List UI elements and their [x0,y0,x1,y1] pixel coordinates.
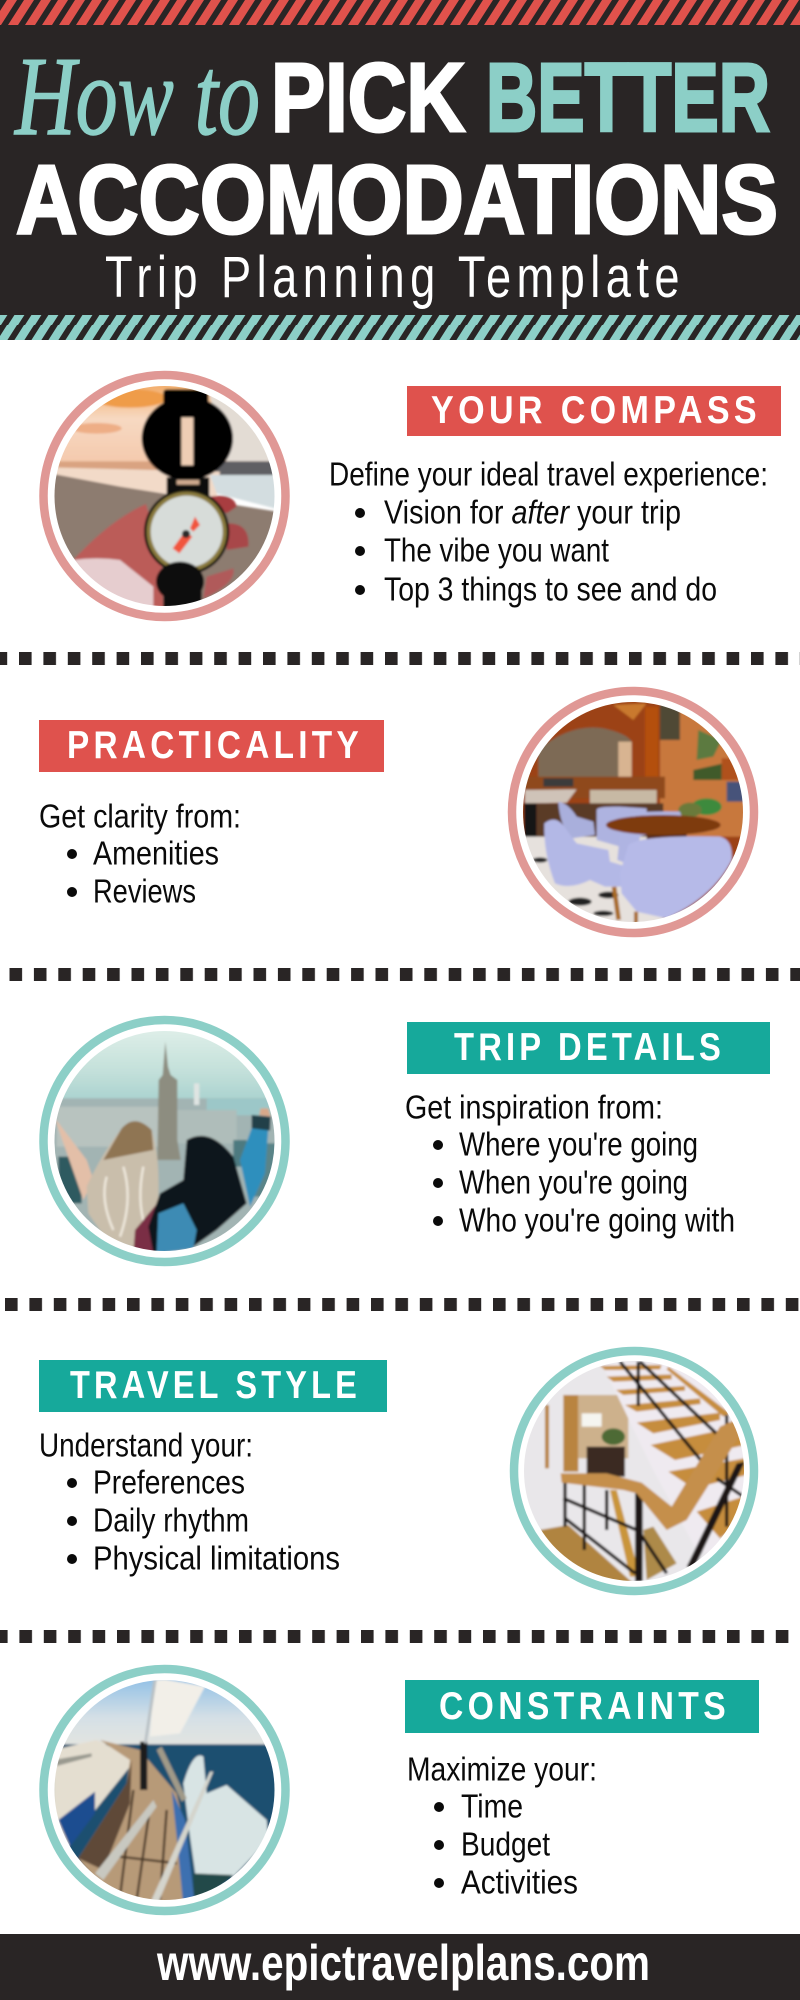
panel: your compass [44,375,781,617]
heading: practicality: PRACTICALITY [67,724,363,767]
heading: travel style: TRAVEL STYLE [70,1364,361,1407]
text block: your compass: Vision for after your trip [384,494,681,531]
text block: trip details: Where you're going [459,1126,698,1163]
heading: your compass: YOUR COMPASS [431,389,761,432]
text block: travel style: Daily rhythm [93,1502,249,1539]
text block: constraints: Maximize your: [407,1751,597,1788]
text block: trip details: Who you're going with [459,1202,735,1239]
heading: constraints: CONSTRAINTS [439,1685,730,1728]
text block: your compass: Top 3 things to see and do [384,571,717,608]
top red striped band [0,0,800,25]
photo: sailboat deck at sea [44,1669,286,1911]
text block: practicality: Reviews [93,873,196,910]
title script: How to: How to [14,35,260,159]
panel: constraints [44,1669,759,1911]
text block: travel style: Preferences [93,1464,245,1501]
text block: travel style: Understand your: [39,1427,253,1464]
text block: practicality: Get clarity from: [39,798,241,835]
text block: travel style [39,1427,340,1577]
text block: constraints [407,1751,597,1901]
text block: constraints: Activities [461,1864,578,1901]
text block: trip details [405,1089,735,1239]
text block: trip details: When you're going [459,1164,688,1201]
photo: restaurant interior [512,691,754,933]
photo: wooden staircase [514,1351,754,1591]
panel: trip details [44,1020,770,1262]
text block: practicality [39,798,241,910]
teal striped band [0,315,800,340]
title: PICK: PICK [271,43,465,152]
text block: trip details: Get inspiration from: [405,1089,663,1126]
panel: travel style [39,1351,754,1591]
text block: your compass [329,456,768,608]
website url: www.epictravelplans.com [156,1935,650,1991]
photo: friends overlooking New York [44,1020,286,1262]
text block: your compass: The vibe you want [384,532,609,569]
footer bar [0,1934,800,2000]
header panel [0,25,800,315]
photo: compass at the beach [44,375,286,617]
text block: constraints: Time [461,1788,523,1825]
text block: practicality: Amenities [93,835,219,872]
heading: trip details: TRIP DETAILS [454,1026,725,1069]
text block: travel style: Physical limitations [93,1540,340,1577]
text block: constraints: Budget [461,1826,550,1863]
panel: practicality [39,691,754,933]
